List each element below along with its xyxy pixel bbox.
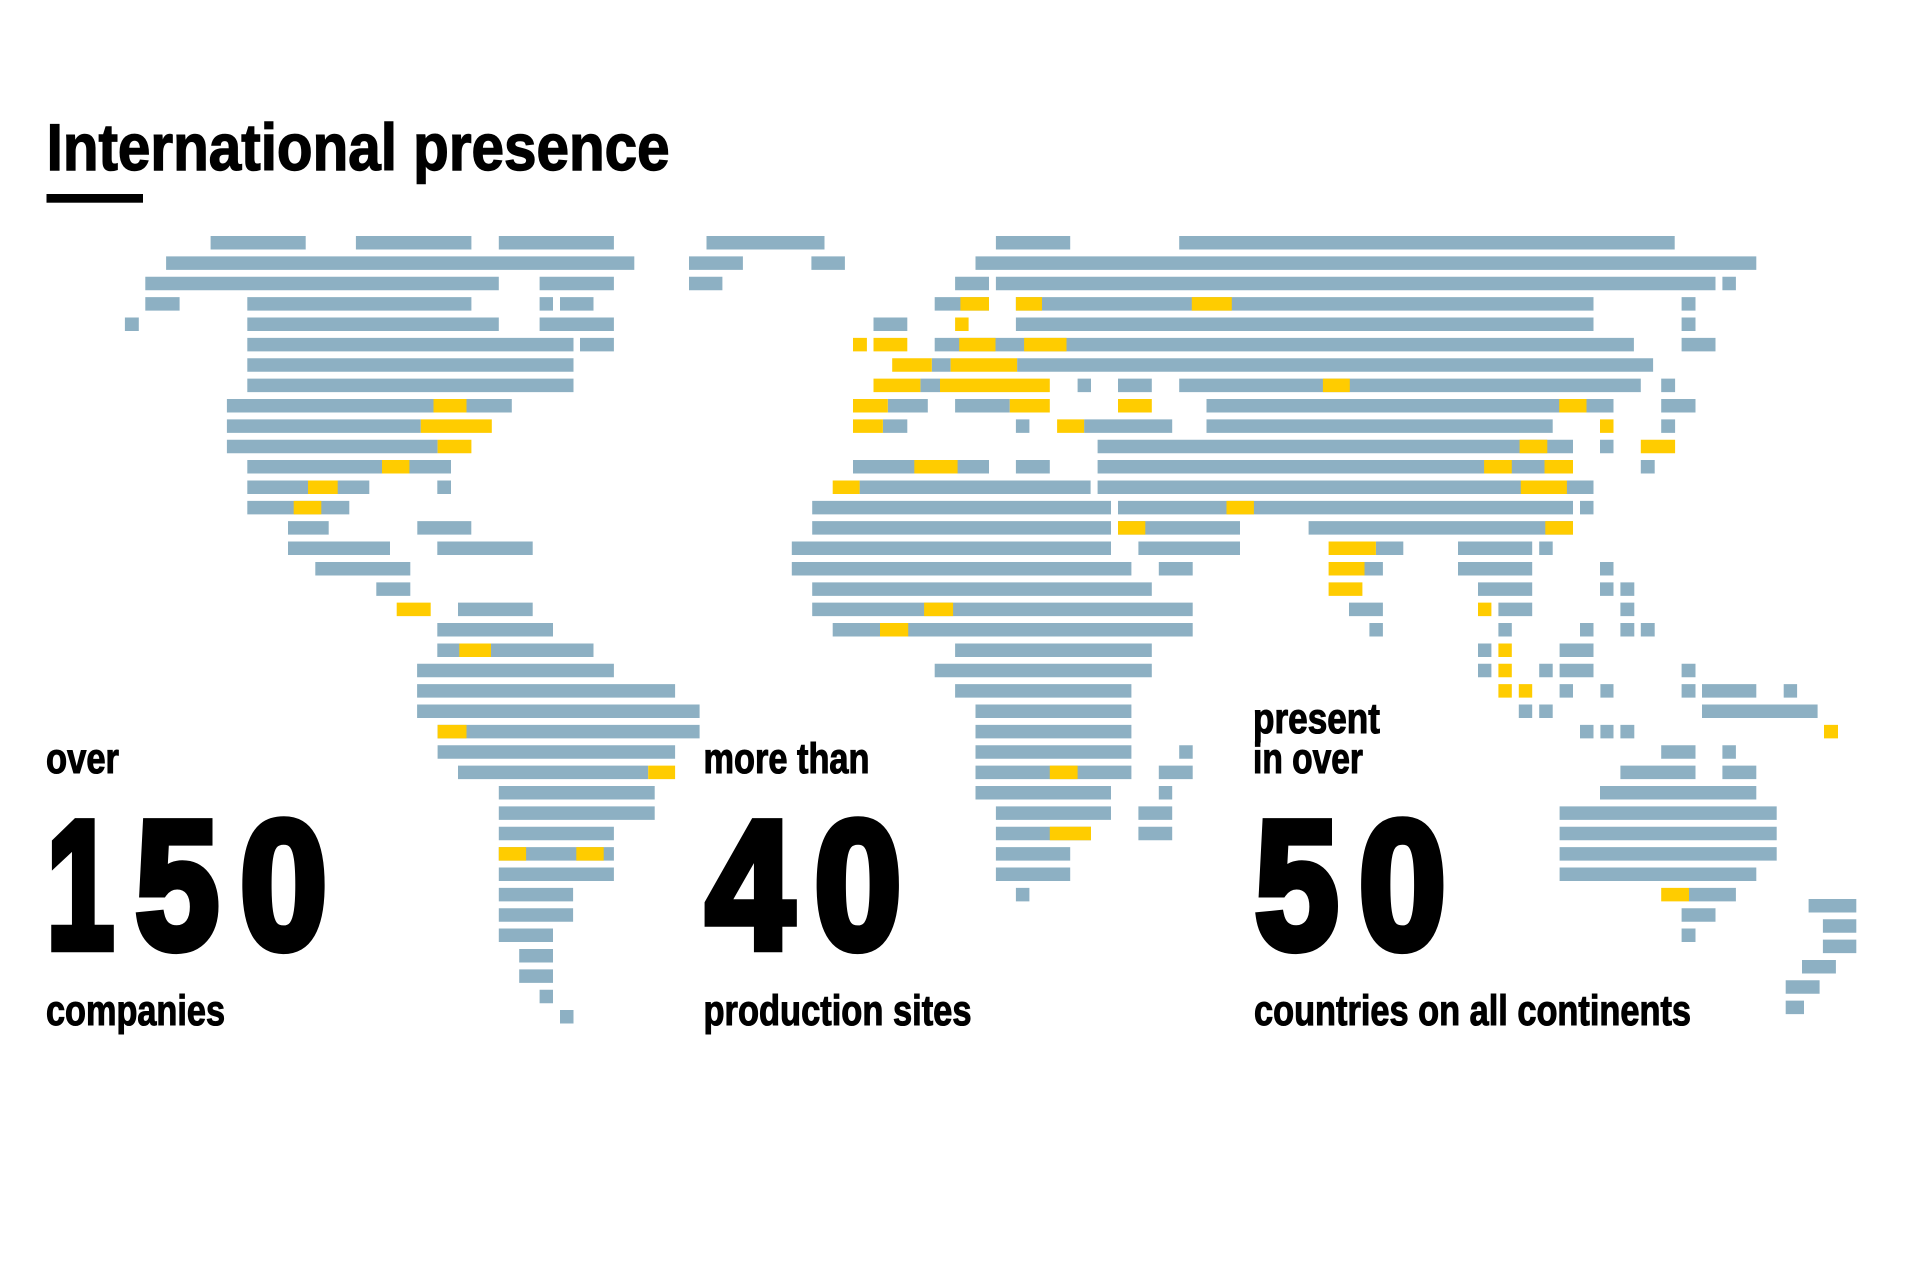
label: production sites: production sites [704, 988, 972, 1035]
number: 150 [47, 783, 327, 987]
stat: production sites [704, 736, 972, 1035]
label: in over: in over [1253, 736, 1363, 783]
number: 40: 4 [706, 783, 794, 987]
label: countries on all continents: countries on all continents [1254, 988, 1691, 1035]
number: 50: 5 [1255, 783, 1338, 987]
number: 50 [1255, 783, 1446, 987]
map: North America [125, 243, 634, 630]
title: International presence [47, 110, 670, 184]
label: over: over [46, 736, 119, 783]
number: 150: 0 [240, 783, 327, 987]
map: South America [417, 650, 700, 1017]
map: Europe and Asia [853, 243, 1756, 732]
label: companies: companies [46, 988, 225, 1035]
number: 150: 5 [135, 783, 219, 987]
label: present: present [1253, 696, 1380, 743]
number: 40 [706, 783, 902, 987]
map: New Zealand [1786, 906, 1856, 1007]
stat: companies [46, 736, 327, 1035]
world map [125, 243, 1856, 1017]
stat: countries [1253, 696, 1691, 1035]
map: Africa and Madagascar [792, 487, 1193, 895]
number: 150: 1 [47, 783, 114, 987]
map: Australia and Pacific [1560, 670, 1838, 935]
label: more than: more than [704, 736, 870, 783]
number: 50: 0 [1359, 783, 1446, 987]
number: 40: 0 [814, 783, 902, 987]
title underline [46, 194, 143, 203]
map: Greenland and Iceland [689, 243, 845, 284]
